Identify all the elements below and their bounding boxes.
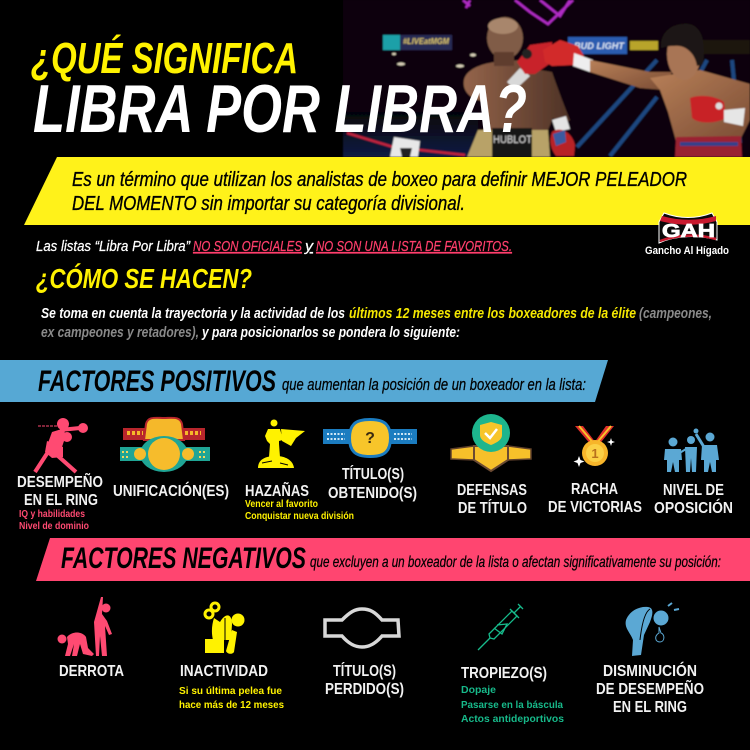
label: UNIFICACIÓN(ES)	[113, 481, 229, 500]
factor: nivel de oposicion	[654, 428, 733, 517]
title line 2: LIBRA POR LIBRA?	[33, 71, 527, 147]
explanation paragraph: ex campeones y retadores),	[41, 325, 199, 341]
detail: IQ y habilidades	[19, 508, 85, 520]
note: lists are not official	[36, 238, 512, 255]
banner: factores positivos	[0, 360, 608, 402]
icon: hero on globe	[258, 420, 305, 468]
factor: disminucion de desempeno	[596, 603, 704, 716]
note: lists are not official: y	[304, 238, 315, 255]
explanation paragraph: y para posicionarlos se pondera lo siguiente:	[201, 325, 460, 341]
explanation paragraph: (campeones,	[639, 306, 712, 322]
photo: boxers in the ring: BUD LIGHT	[574, 41, 626, 51]
label: TÍTULO(S)	[342, 464, 404, 483]
detail: Vencer al favorito	[245, 498, 318, 510]
explanation paragraph: últimos 12 meses entre los boxeadores de la élite	[349, 306, 636, 322]
factor: defensas de titulo: DE TÍTULO	[458, 498, 527, 517]
icon: medal: 1	[591, 446, 599, 461]
factor: tropiezo: Pasarse en la báscula	[461, 699, 563, 711]
factor: hazanas	[245, 420, 354, 522]
label: DERROTA	[59, 663, 124, 680]
factor: disminucion de desempeno: DE DESEMPEÑO	[596, 678, 704, 698]
factor: hazanas: Conquistar nueva división	[245, 510, 354, 522]
icon: boxer	[35, 418, 88, 472]
factor: nivel de oposicion: OPOSICIÓN	[654, 498, 733, 517]
factor: titulo obtenido	[323, 420, 417, 502]
label: RACHA	[571, 481, 618, 498]
factor: desempeno en el ring: Nivel de dominio	[19, 520, 89, 532]
banner: factores negativos	[36, 538, 750, 581]
factor: titulo obtenido: OBTENIDO(S)	[328, 485, 417, 502]
icon: belt with shield	[451, 414, 531, 471]
factor: tropiezo	[461, 604, 564, 725]
explanation paragraph	[41, 306, 712, 341]
photo: boxers in the ring	[343, 0, 750, 157]
factor: unificacion	[113, 418, 229, 500]
title line 1: ¿QUÉ SIGNIFICA	[31, 33, 298, 83]
icon: belt outline	[325, 609, 399, 647]
icon: referee raising boxer arm	[664, 428, 719, 472]
factor: derrota	[58, 597, 124, 680]
definition text	[72, 169, 687, 215]
label: DEFENSAS	[457, 482, 527, 499]
factor: inactividad	[179, 603, 284, 711]
detail: Dopaje	[461, 684, 496, 696]
logo: Gancho Al Hígado	[645, 213, 729, 257]
label: HAZAÑAS	[245, 480, 309, 500]
heading: como se hacen: ¿CÓMO SE HACEN?	[36, 263, 252, 294]
label: NIVEL DE	[663, 482, 724, 499]
detail: Si su última pelea fue	[179, 685, 282, 697]
photo: boxers in the ring: #LIVEatMGM	[403, 37, 449, 46]
explanation paragraph: Se toma en cuenta la trayectoria y la actividad de los	[41, 306, 345, 322]
banner heading: FACTORES NEGATIVOS	[61, 542, 306, 575]
banner heading: FACTORES POSITIVOS	[38, 365, 276, 398]
banner subtext: que aumentan la posición de un boxeador en la lista:	[282, 375, 586, 394]
factor: racha de victorias	[548, 426, 642, 516]
icon: syringe	[478, 604, 523, 650]
label: TROPIEZO(S)	[461, 665, 547, 682]
factor: inactividad: hace más de 12 meses	[179, 699, 284, 711]
icon: belt with question mark: ?	[365, 430, 375, 447]
icon: wind-up figure	[205, 603, 244, 654]
factor: defensas de titulo	[451, 414, 531, 517]
factor: racha de victorias: DE VICTORIAS	[548, 499, 642, 516]
factor: titulo perdido: PERDIDO(S)	[325, 681, 404, 698]
definition text: DEL MOMENTO sin importar su categoría divisional.	[72, 193, 465, 215]
label: TÍTULO(S)	[333, 661, 396, 680]
factor: tropiezo: Actos antideportivos	[461, 713, 564, 725]
icon: fallen and standing figures	[58, 597, 112, 656]
definition band	[24, 157, 750, 225]
factor: titulo perdido	[325, 609, 404, 698]
logo: Gancho Al Hígado: GAH	[662, 221, 715, 241]
photo: boxers in the ring: HUBLOT	[493, 134, 532, 146]
note: lists are not official: NO SON UNA LISTA DE FAVORITOS.	[316, 238, 512, 255]
title	[31, 33, 527, 147]
icon: bent-over figure	[626, 603, 679, 656]
label: DESEMPEÑO	[17, 471, 103, 491]
icon: two belts	[120, 418, 210, 472]
factor: desempeno en el ring: EN EL RING	[24, 492, 98, 509]
label: DISMINUCIÓN	[603, 661, 697, 680]
label: INACTIVIDAD	[180, 663, 268, 680]
note: lists are not official: NO SON OFICIALES	[193, 238, 302, 255]
factor: desempeno en el ring	[17, 418, 103, 532]
logo name: Gancho Al Hígado	[645, 245, 729, 257]
note: lists are not official: Las listas “Libra Por Libra”	[36, 238, 191, 255]
factor: disminucion de desempeno: EN EL RING	[613, 699, 687, 716]
